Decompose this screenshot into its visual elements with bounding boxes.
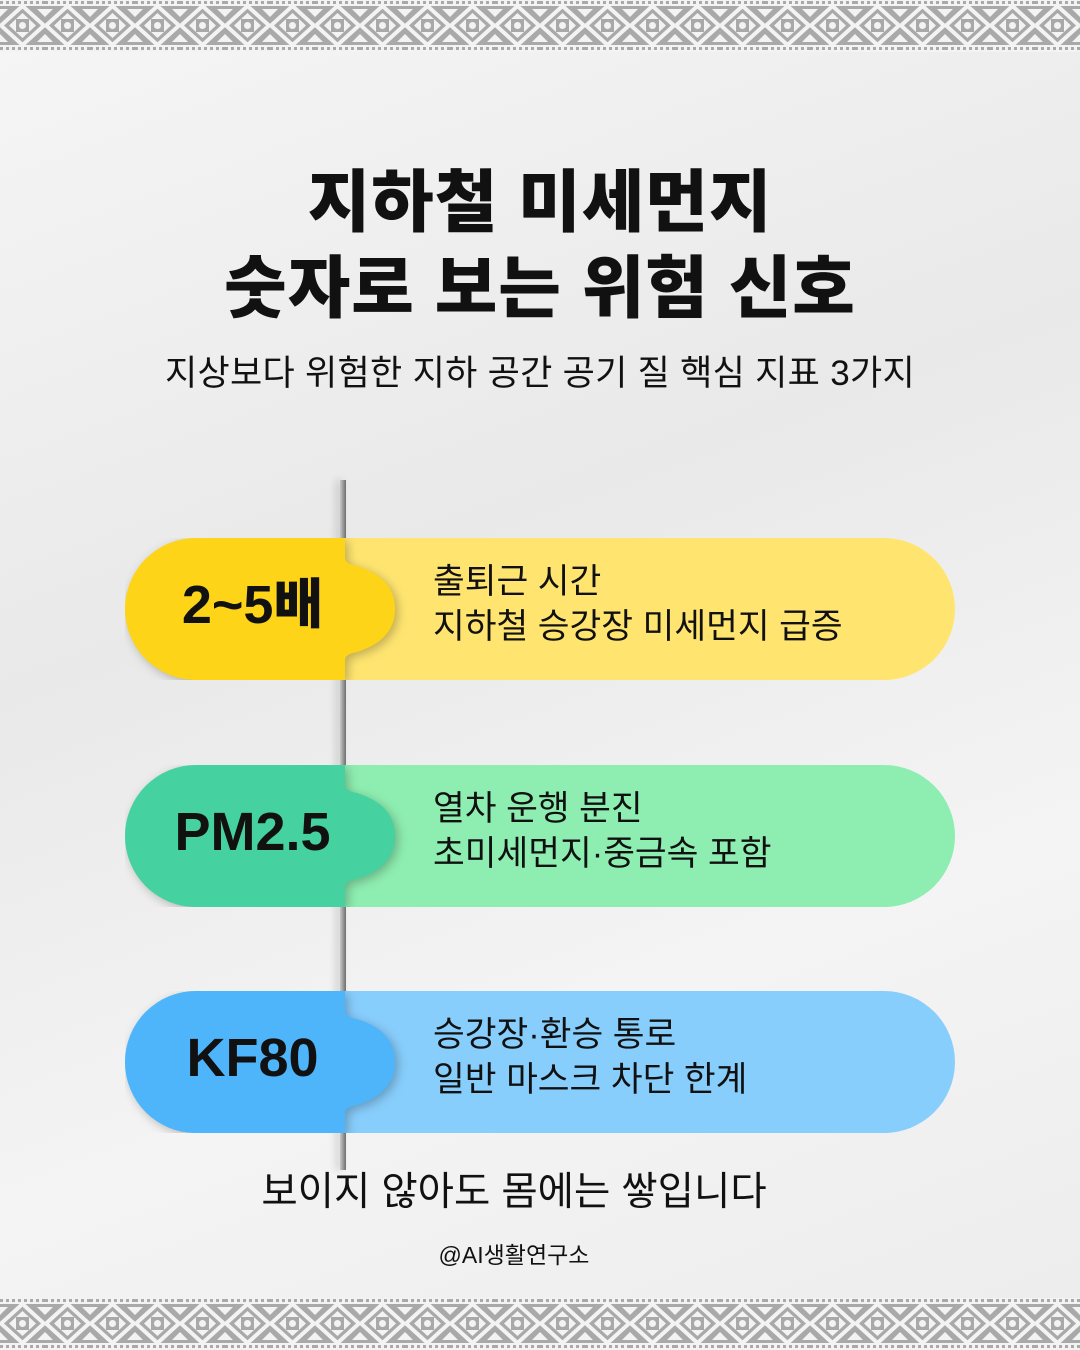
description: 일반 마스크 차단 한계 bbox=[433, 1061, 747, 1099]
description: 승강장·환승 통로 bbox=[433, 1016, 676, 1054]
closing message: 보이지 않아도 몸에는 쌓입니다 bbox=[261, 1170, 767, 1214]
title: 지하철 미세먼지 bbox=[308, 165, 772, 241]
description bbox=[433, 790, 771, 873]
title: 숫자로 보는 위험 신호 bbox=[224, 251, 856, 327]
credit: @AI생활연구소 bbox=[439, 1242, 589, 1268]
card 2: PM2.5 bbox=[125, 765, 955, 907]
description bbox=[433, 1016, 747, 1099]
card 3: KF80 bbox=[125, 991, 955, 1133]
subtitle: 지상보다 위험한 지하 공간 공기 질 핵심 지표 3가지 bbox=[165, 354, 915, 393]
description bbox=[433, 563, 843, 646]
description: 지하철 승강장 미세먼지 급증 bbox=[433, 608, 843, 646]
value label: 2~5배 bbox=[182, 575, 323, 635]
vertical timeline line bbox=[340, 480, 346, 1170]
value label: KF80 bbox=[186, 1028, 319, 1088]
description: 출퇴근 시간 bbox=[433, 563, 601, 601]
card 1: 2~5배 bbox=[125, 538, 955, 680]
title bbox=[224, 165, 856, 327]
description: 초미세먼지·중금속 포함 bbox=[433, 835, 771, 873]
value label: PM2.5 bbox=[174, 802, 331, 862]
bottom border pattern bbox=[0, 1299, 1080, 1348]
description: 열차 운행 분진 bbox=[433, 790, 643, 828]
top border pattern bbox=[0, 1, 1080, 50]
